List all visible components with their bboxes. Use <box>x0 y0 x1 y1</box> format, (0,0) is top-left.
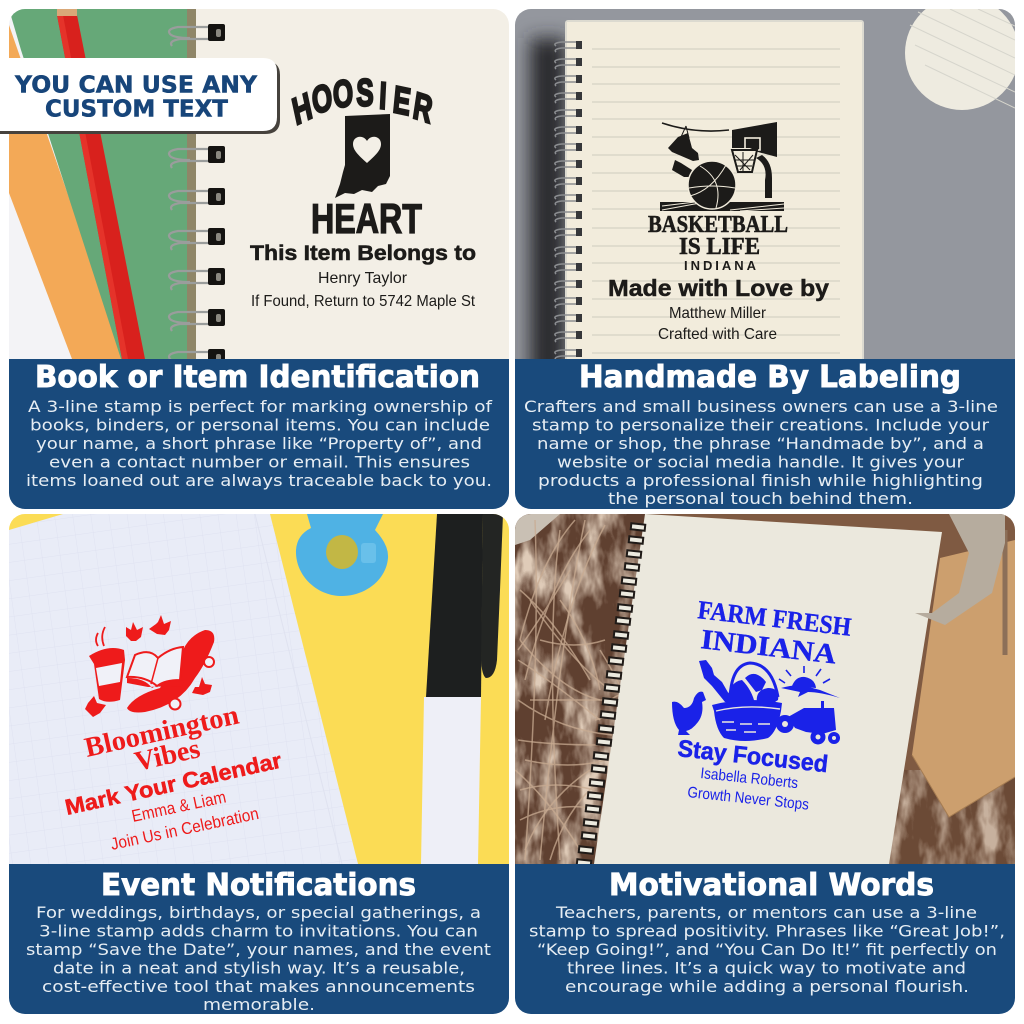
arched word HOOSIER: HOOSIER <box>289 72 435 133</box>
banner: you can use any custom text: CUSTOM TEXT <box>45 96 228 122</box>
body text: For weddings, birthdays, or special gatherings, a <box>36 904 481 922</box>
photo: lined spiral notebook on grey desk <box>515 0 1019 383</box>
body text: Teachers, parents, or mentors can use a 3-line <box>555 904 977 922</box>
body text: “Keep Going!”, and “You Can Do It!” fit perfectly on <box>537 941 997 959</box>
body text: 3-line stamp adds charm to invitations. You can <box>39 922 478 940</box>
photo: grid notebook, blue clip and marker on yellow <box>9 514 509 864</box>
body text <box>529 904 1005 996</box>
body text: three lines. It’s a quick way to motivate and <box>567 960 966 978</box>
body text: website or social media handle. It gives your <box>557 454 965 472</box>
stamp: Farm Fresh Indiana <box>672 595 853 814</box>
body text: date in a neat and stylish way. It’s a reusable, <box>53 960 465 978</box>
word INDIANA: INDIANA <box>699 624 839 671</box>
body text <box>26 398 493 490</box>
caption bar: event notifications <box>9 864 509 1014</box>
body text: the personal touch behind them. <box>608 490 913 508</box>
body text: items loaned out are always traceable back to you. <box>26 472 492 490</box>
line: Crafted with Care: Crafted with Care <box>658 326 777 343</box>
line: Made with Love by: Made with Love by <box>608 275 829 301</box>
line: Emma & Liam: Emma & Liam <box>130 787 228 826</box>
heading: Book or Item Identification <box>35 360 480 395</box>
photo: notebook with green and orange papers and red pencil <box>9 9 509 371</box>
heading: Motivational Words <box>609 868 934 903</box>
line: This Item Belongs to: This Item Belongs to <box>250 241 476 265</box>
line: Isabella Roberts: Isabella Roberts <box>700 765 799 792</box>
body text: books, binders, or personal items. You can include <box>30 416 490 434</box>
icon: Indiana state with heart <box>335 114 390 198</box>
banner: you can use any custom text: YOU CAN USE ANY <box>14 72 257 98</box>
panel: motivational words <box>515 514 1015 1014</box>
body text: stamp “Save the Date”, your names, and the event <box>26 941 491 959</box>
icon: basketball hoop, ball and sneakers <box>660 122 784 211</box>
line: Matthew Miller: Matthew Miller <box>669 305 767 322</box>
word Bloomington: Bloomington <box>82 699 242 764</box>
body text: your name, a short phrase like “Property of”, and <box>36 435 482 453</box>
panel: event notifications <box>9 514 509 1014</box>
body text: products a professional finish while highlighting <box>538 472 983 490</box>
stamp: Hoosier Heart <box>250 72 476 310</box>
icon: coffee cup, book, skateboard and leaves <box>85 615 214 717</box>
caption bar: motivational words <box>515 864 1015 1014</box>
panel: handmade by labeling <box>515 0 1019 509</box>
body text <box>524 398 998 508</box>
line: If Found return address: If Found, Return to 5742 Maple St <box>251 293 476 310</box>
body text: A 3-line stamp is perfect for marking ownership of <box>28 398 493 416</box>
body text: cost-effective tool that makes announcements <box>42 978 475 996</box>
word FARM FRESH: FARM FRESH <box>696 595 853 642</box>
panel: book or item identification <box>9 9 509 509</box>
caption bar: book or item identification <box>9 359 509 509</box>
word Vibes: Vibes <box>132 733 203 778</box>
icon: chicken, basket, sun and tractor <box>672 660 840 744</box>
body text: memorable. <box>203 996 315 1014</box>
body text: Crafters and small business owners can use a 3-line <box>524 398 998 416</box>
photo: spiral notebook on dried grass, kraft envelope and leaf <box>515 514 1015 867</box>
banner: you can use any custom text <box>0 58 280 134</box>
body text <box>26 904 491 1014</box>
word INDIANA: INDIANA <box>684 258 757 273</box>
line: Growth Never Stops: Growth Never Stops <box>687 784 810 814</box>
line: Mark Your Calendar: Mark Your Calendar <box>63 748 284 820</box>
word HEART: HEART <box>311 195 422 242</box>
body text: name or shop, the phrase “Handmade by”, and a <box>537 435 984 453</box>
line: Stay Focused: Stay Focused <box>676 735 829 778</box>
line: Henry Taylor: Henry Taylor <box>318 270 408 287</box>
body text: even a contact number or email. This ensures <box>49 454 470 472</box>
heading: Handmade By Labeling <box>579 360 961 395</box>
stamp: Bloomington Vibes <box>63 615 284 854</box>
body text: encourage while adding a personal flourish. <box>565 978 969 996</box>
body text: stamp to spread positivity. Phrases like “Great Job!”, <box>529 922 1005 940</box>
word BASKETBALL: BASKETBALL <box>648 212 788 238</box>
body text: stamp to personalize their creations. Include your <box>532 416 990 434</box>
caption bar: handmade by labeling <box>515 359 1015 509</box>
heading: Event Notifications <box>101 868 416 903</box>
word IS LIFE: IS LIFE <box>679 234 760 260</box>
line: Join Us in Celebration: Join Us in Celebration <box>109 804 261 854</box>
stamp: Basketball is Life <box>608 122 829 343</box>
